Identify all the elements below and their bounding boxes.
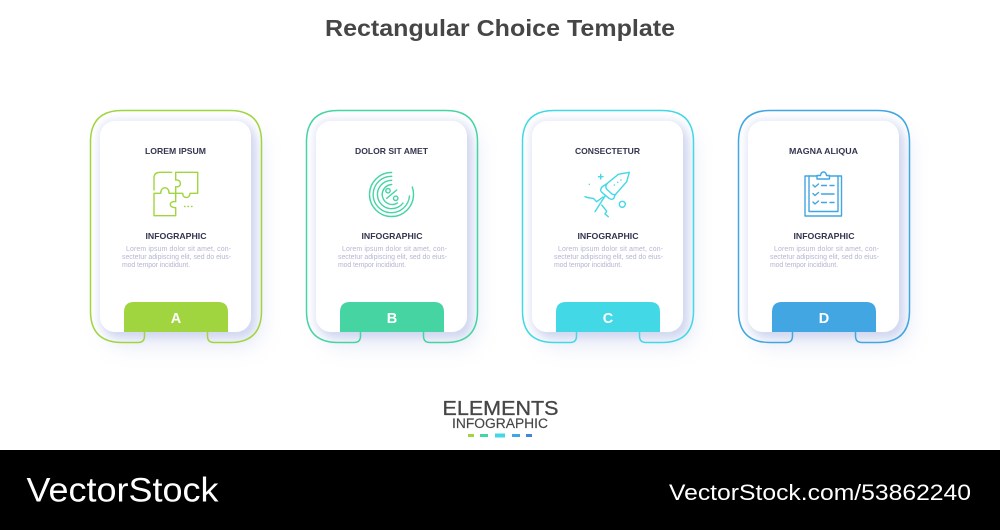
logo colour dashes	[468, 434, 532, 438]
card C body text: Lorem ipsum dolor sit amet, con-	[558, 246, 663, 253]
card A white panel	[100, 121, 251, 332]
card B tab	[340, 302, 444, 332]
card D outline	[738, 110, 910, 342]
card B body text: mod tempor incididunt.	[338, 262, 406, 269]
card D white panel	[748, 121, 899, 332]
card D letter: D	[819, 311, 829, 327]
logo: elements infographic	[442, 397, 558, 438]
card C subheading: INFOGRAPHIC	[578, 232, 639, 241]
card B subheading: INFOGRAPHIC	[362, 232, 423, 241]
card B letter: B	[387, 311, 397, 327]
card D body text: Lorem ipsum dolor sit amet, con-	[774, 246, 879, 253]
panel: option D	[738, 110, 910, 346]
icon: rocket	[585, 172, 629, 217]
card B body text: sectetur adipiscing elit, sed do eius-	[338, 254, 447, 261]
card B body text	[338, 246, 447, 269]
card D body text: sectetur adipiscing elit, sed do eius-	[770, 254, 879, 261]
card A shadow	[97, 118, 261, 346]
card D shadow	[745, 118, 909, 346]
card C heading: CONSECTETUR	[575, 147, 640, 156]
card D body text	[770, 246, 879, 269]
card A subheading: INFOGRAPHIC	[146, 232, 207, 241]
card A body text: sectetur adipiscing elit, sed do eius-	[122, 254, 231, 261]
card C body text	[554, 246, 663, 269]
logo word: infographic: INFOGRAPHIC	[452, 416, 548, 431]
card D subheading: INFOGRAPHIC	[794, 232, 855, 241]
card A body text	[122, 246, 231, 269]
card D tab	[772, 302, 876, 332]
panel: option A	[90, 110, 262, 346]
card A heading: LOREM IPSUM	[145, 147, 206, 156]
card C body text: sectetur adipiscing elit, sed do eius-	[554, 254, 663, 261]
panel: option B	[306, 110, 478, 346]
panel: option C	[522, 110, 694, 346]
card B white panel	[316, 121, 467, 332]
footer brand: VectorStock	[26, 472, 219, 510]
card A body text: Lorem ipsum dolor sit amet, con-	[126, 246, 231, 253]
icon: percent radar	[370, 172, 414, 216]
title: Rectangular Choice Template	[325, 15, 675, 41]
footer bar	[0, 450, 1000, 530]
card B heading: DOLOR SIT AMET	[355, 147, 428, 156]
card B body text: Lorem ipsum dolor sit amet, con-	[342, 246, 447, 253]
icon: puzzle	[154, 172, 198, 216]
card B shadow	[313, 118, 477, 346]
card C white panel	[532, 121, 683, 332]
card C body text: mod tempor incididunt.	[554, 262, 622, 269]
card C shadow	[529, 118, 693, 346]
card C letter: C	[603, 311, 614, 327]
icon: clipboard	[805, 172, 842, 216]
footer url: VectorStock.com/53862240	[669, 480, 971, 505]
card D body text: mod tempor incididunt.	[770, 262, 838, 269]
card C tab	[556, 302, 660, 332]
card A letter: A	[171, 311, 182, 327]
card C outline	[522, 110, 694, 342]
card A tab	[124, 302, 228, 332]
logo word: elements: ELEMENTS	[442, 397, 558, 420]
card A body text: mod tempor incididunt.	[122, 262, 190, 269]
card D heading: MAGNA ALIQUA	[789, 147, 858, 156]
card A outline	[90, 110, 262, 342]
card B outline	[306, 110, 478, 342]
